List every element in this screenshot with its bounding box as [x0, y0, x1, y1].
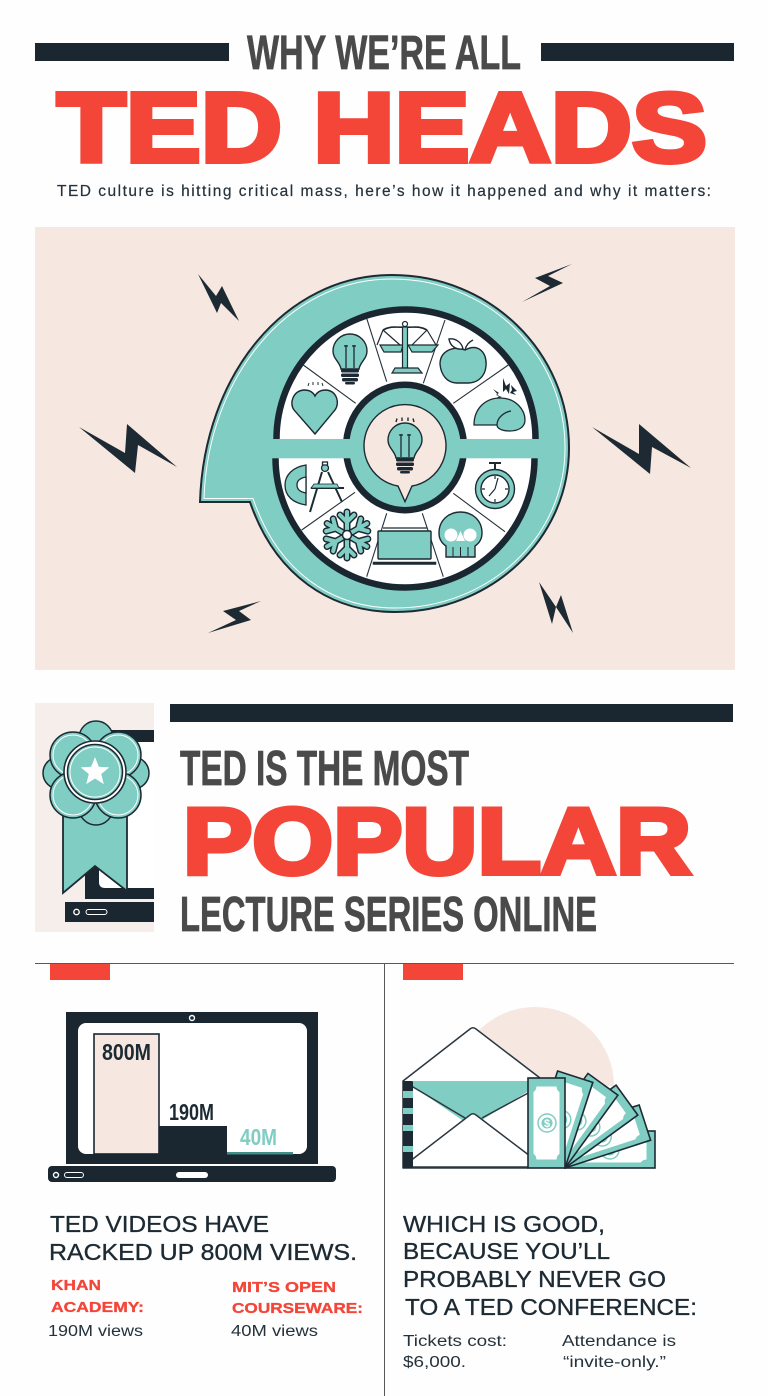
stat: attendance: “invite-only.” [563, 1354, 666, 1371]
hero background [35, 227, 735, 670]
stat: khan academy: 190M views [48, 1323, 143, 1340]
icon: protractor and compass [285, 462, 344, 512]
stat: khan academy: KHAN [51, 1278, 101, 1294]
icon: scales [377, 322, 438, 373]
stat: mit open courseware: 40M views [231, 1323, 318, 1340]
heading bar [170, 704, 733, 722]
stat: ticket cost: Tickets cost: [403, 1333, 507, 1350]
spiral shell [200, 275, 569, 612]
icon: stopwatch [476, 463, 514, 508]
heading line one: TED IS THE MOST [180, 742, 469, 796]
stat: attendance: Attendance is [562, 1333, 676, 1350]
stat: khan academy [48, 1278, 144, 1340]
lightning bolts [79, 264, 691, 633]
stat: khan academy: ACADEMY: [51, 1300, 144, 1316]
icon: lightbulb [333, 334, 367, 384]
subtitle: TED culture is hitting critical mass, here’s how it happened and why it matters: [57, 183, 711, 200]
icon: brain with sparks [474, 378, 525, 431]
panel: popular section badge [35, 703, 154, 932]
panel: video views [48, 1012, 363, 1340]
laptop bar chart [48, 1012, 336, 1182]
panel: hero illustration [35, 227, 735, 670]
stat: ticket cost: $6,000. [403, 1354, 466, 1371]
panel: conference [403, 1007, 697, 1371]
video views statement: TED VIDEOS HAVE [50, 1211, 269, 1237]
badge background [35, 703, 154, 932]
stat: mit open courseware [231, 1280, 363, 1340]
title line two: TED HEADS [57, 72, 707, 182]
conference statement: TO A TED CONFERENCE: [405, 1294, 697, 1320]
conference statement: BECAUSE YOU’LL [403, 1238, 610, 1264]
title line one: WHY WE’RE ALL [247, 27, 521, 80]
heading: popular [170, 704, 733, 942]
conference statement: WHICH IS GOOD, [403, 1211, 605, 1237]
header bar left [35, 43, 229, 61]
wheel [268, 309, 548, 587]
laptop bar chart: 190M [169, 1099, 214, 1125]
stat: mit open courseware: COURSEWARE: [232, 1301, 363, 1317]
laptop frame behind rosette [65, 730, 154, 922]
envelope and money illustration: $ [544, 1118, 550, 1130]
laptop bar chart: 800M [102, 1039, 151, 1065]
icon: laptop [373, 528, 436, 564]
icon: skull [439, 512, 482, 557]
envelope and money illustration [403, 1007, 655, 1168]
icon: snowflake [324, 512, 370, 558]
stat: mit open courseware: MIT’S OPEN [232, 1280, 336, 1296]
rosette [43, 721, 149, 825]
icon: apple [440, 339, 486, 383]
laptop bar chart: 40M [240, 1124, 277, 1150]
video views statement [49, 1211, 357, 1265]
ribbon [63, 805, 127, 893]
dividers and tabs [35, 963, 734, 1396]
conference statement [403, 1211, 697, 1320]
icon: heart [292, 382, 337, 434]
stat: attendance [562, 1333, 676, 1371]
conference statement: PROBABLY NEVER GO [403, 1266, 666, 1292]
video views statement: RACKED UP 800M VIEWS. [49, 1239, 357, 1265]
icon: centre speech bubble with lightbulb [364, 405, 446, 502]
header [35, 27, 734, 200]
stat: ticket cost [403, 1333, 507, 1371]
heading word popular: POPULAR [183, 788, 691, 894]
header bar right [541, 43, 734, 61]
